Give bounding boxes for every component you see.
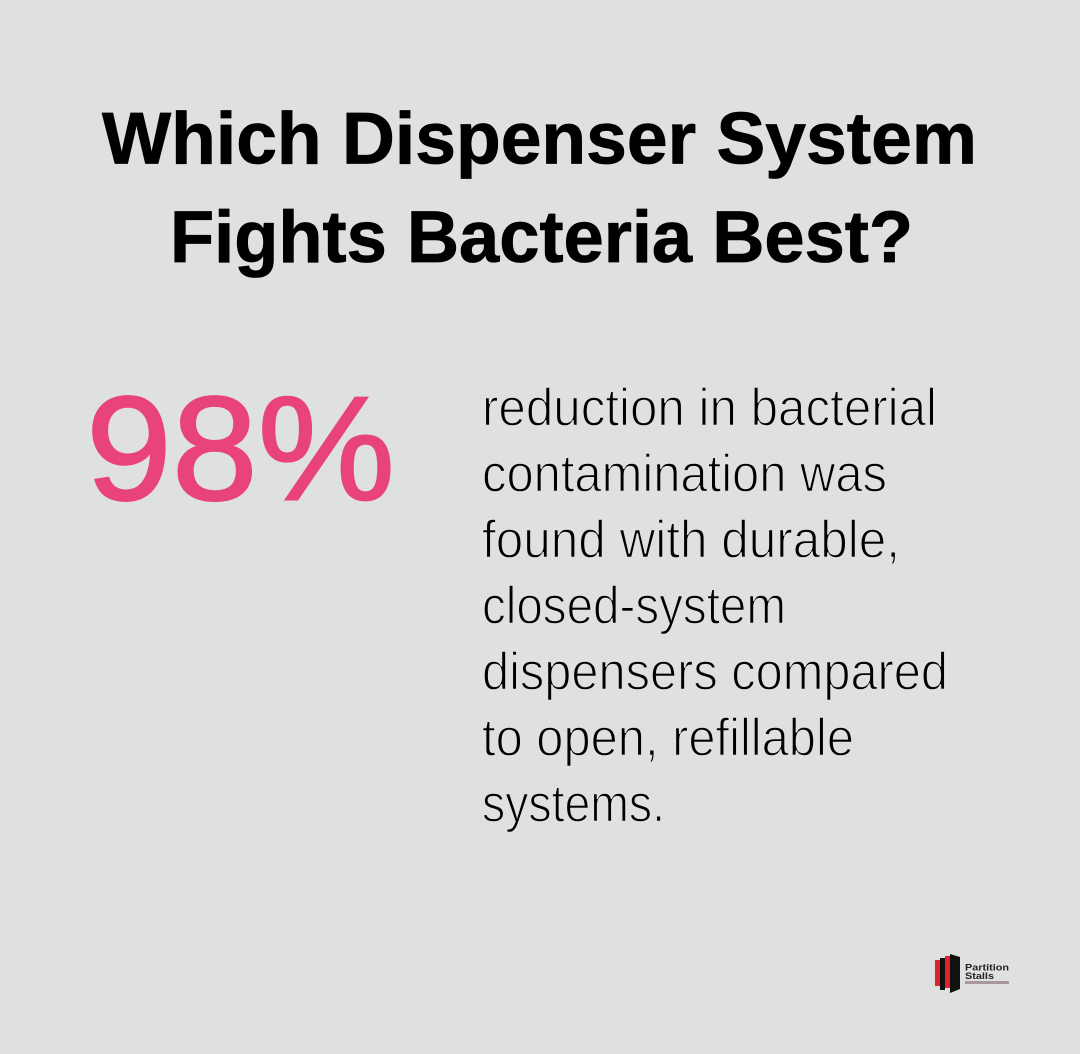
title: Fights Bacteria Best? xyxy=(170,197,913,278)
description text: closed-system xyxy=(482,576,786,636)
description text: contamination was xyxy=(482,444,887,504)
description text: systems. xyxy=(482,774,665,834)
description text: to open, refillable xyxy=(482,708,854,768)
description text: dispensers compared xyxy=(482,642,948,702)
logo: Partition Stalls xyxy=(935,954,1009,993)
big stat: 98%: 98% xyxy=(86,366,395,532)
logo wordmark: Partition xyxy=(965,962,1009,974)
logo wordmark: Stalls xyxy=(965,971,994,982)
title xyxy=(102,98,977,278)
logo tagline strip xyxy=(965,981,1009,984)
title: Which Dispenser System xyxy=(102,98,977,180)
description text: found with durable, xyxy=(482,510,900,570)
description text: reduction in bacterial xyxy=(482,378,937,438)
icon: partition bars xyxy=(935,954,960,993)
description text xyxy=(482,378,948,834)
logo wordmark xyxy=(965,962,1009,982)
